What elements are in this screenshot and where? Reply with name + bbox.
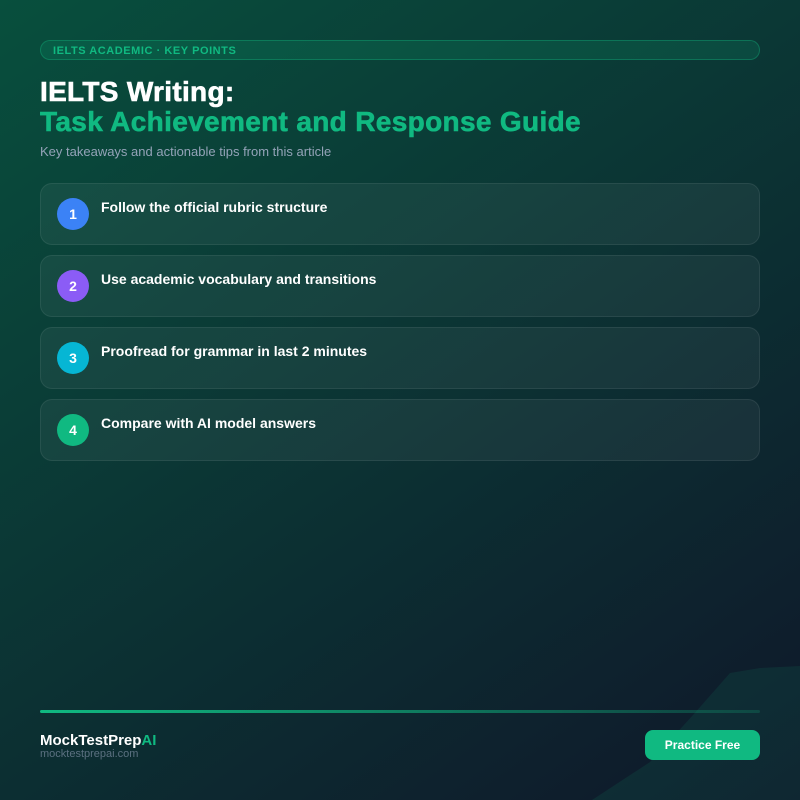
panel: point 4 [40, 399, 760, 461]
panel: point 1 [40, 183, 760, 245]
badge [40, 40, 760, 60]
point 4 text: Compare with AI model answers [101, 415, 316, 431]
number 2 [57, 270, 89, 302]
panel: point 3 [40, 327, 760, 389]
number 4: 4 [69, 422, 77, 438]
number 2: 2 [69, 278, 77, 294]
subtitle: Key takeaways and actionable tips from this article [40, 144, 331, 159]
number 4 [57, 414, 89, 446]
brand name: MockTestPrepAI [40, 732, 156, 749]
point 1 text: Follow the official rubric structure [101, 199, 327, 215]
number 3: 3 [69, 350, 77, 366]
point 3 text: Proofread for grammar in last 2 minutes [101, 343, 367, 359]
button: Practice Free: Practice Free [665, 738, 740, 752]
badge: IELTS ACADEMIC · KEY POINTS [53, 45, 236, 57]
title: IELTS Writing: [40, 76, 234, 107]
number 1 [57, 198, 89, 230]
button: Practice Free [645, 730, 760, 760]
brand url: mocktestprepai.com [40, 748, 138, 760]
footer rule [40, 710, 760, 713]
title: Task Achievement and Response Guide [40, 106, 581, 137]
title [40, 76, 581, 138]
point 2 text: Use academic vocabulary and transitions [101, 271, 376, 287]
number 1: 1 [69, 206, 77, 222]
number 3 [57, 342, 89, 374]
panel: point 2 [40, 255, 760, 317]
